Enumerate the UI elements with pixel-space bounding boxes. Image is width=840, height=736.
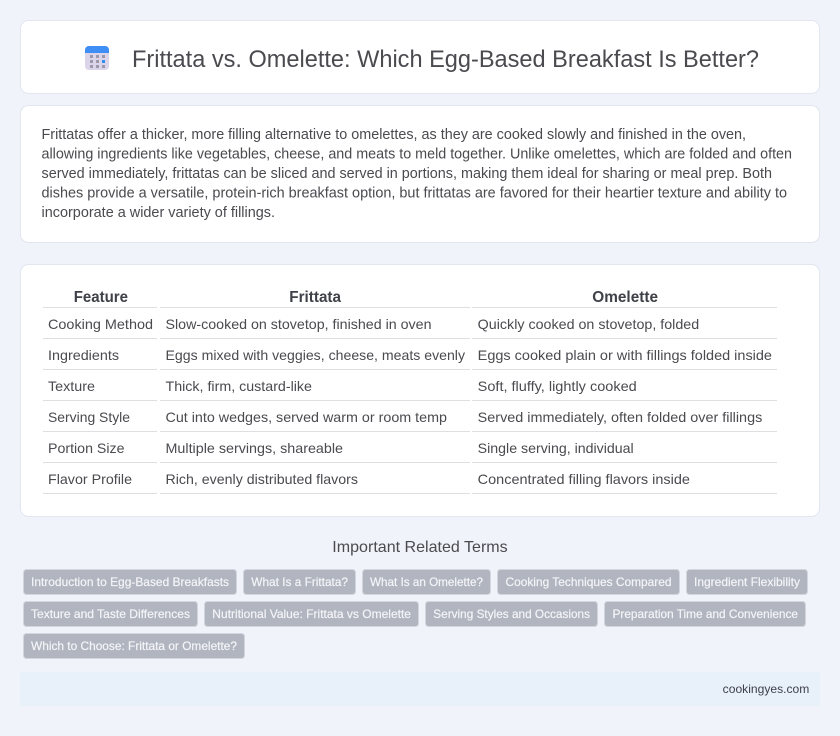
- row: ingredients: [48, 347, 772, 363]
- row: texture: Texture: [48, 378, 95, 394]
- tag labels: Texture and Taste Differences: [31, 607, 190, 621]
- row: cooking method: Quickly cooked on stovetop, folded: [478, 316, 699, 332]
- tag labels: Introduction to Egg-Based Breakfasts: [31, 575, 229, 589]
- tag labels: Cooking Techniques Compared: [506, 575, 672, 589]
- row: serving style: Cut into wedges, served warm or room temp: [166, 409, 447, 425]
- table header row: Frittata: [289, 289, 341, 306]
- row: flavor profile: Rich, evenly distributed flavors: [166, 471, 358, 487]
- tag labels: What Is a Frittata?: [251, 575, 348, 589]
- row: serving style: Serving Style: [48, 409, 130, 425]
- row: ingredients: Ingredients: [48, 347, 119, 363]
- heading: important related terms: Important Related Terms: [332, 539, 508, 556]
- row: portion size: Multiple servings, shareable: [166, 440, 343, 456]
- row: flavor profile: Flavor Profile: [48, 471, 132, 487]
- row: portion size: Single serving, individual: [478, 440, 634, 456]
- panel: related term tags: [24, 570, 808, 658]
- text block: introduction paragraph: [42, 127, 792, 221]
- tag labels: [31, 575, 800, 653]
- table header row: Omelette: [592, 289, 658, 306]
- row: flavor profile: [48, 471, 690, 487]
- footer source text: cookingyes.com: [723, 682, 809, 696]
- footer: [20, 672, 820, 706]
- panel: header: [20, 20, 820, 94]
- tag labels: Preparation Time and Convenience: [612, 607, 798, 621]
- row: cooking method: [48, 316, 699, 332]
- text block: introduction paragraph: incorporate a wider variety of fillings.: [42, 205, 275, 221]
- panel: introduction text: [20, 106, 820, 242]
- row: ingredients: Eggs mixed with veggies, cheese, meats evenly: [166, 347, 465, 363]
- row: texture: Soft, fluffy, lightly cooked: [478, 378, 637, 394]
- row: serving style: [48, 409, 762, 425]
- text block: introduction paragraph: Frittatas offer a thicker, more filling alternative to omelettes, as they are cooked slowly and finished in the oven,: [42, 127, 746, 143]
- row: ingredients: Eggs cooked plain or with fillings folded inside: [478, 347, 772, 363]
- title: Frittata vs. Omelette: Which Egg-Based Breakfast Is Better?: [132, 46, 759, 73]
- tag labels: Ingredient Flexibility: [694, 575, 800, 589]
- tag labels: What Is an Omelette?: [370, 575, 483, 589]
- tag labels: Nutritional Value: Frittata vs Omelette: [212, 607, 411, 621]
- icon: calendar: [85, 46, 109, 70]
- text block: introduction paragraph: allowing ingredients like vegetables, cheese, and meats to meld together. Unlike omelettes, which are folded and often: [42, 146, 792, 162]
- table header row: [74, 289, 658, 306]
- row: cooking method: Slow-cooked on stovetop, finished in oven: [166, 316, 432, 332]
- tag labels: Serving Styles and Occasions: [433, 607, 590, 621]
- row: texture: Thick, firm, custard-like: [166, 378, 312, 394]
- row: flavor profile: Concentrated filling flavors inside: [478, 471, 690, 487]
- table header row: Feature: [74, 289, 128, 306]
- text block: introduction paragraph: dishes provide a versatile, protein-rich breakfast option, but frittatas are favored for their heartier texture and ability to: [42, 186, 787, 202]
- row: portion size: [48, 440, 634, 456]
- row: texture: [48, 378, 637, 394]
- row: portion size: Portion Size: [48, 440, 125, 456]
- row: cooking method: Cooking Method: [48, 316, 153, 332]
- row: serving style: Served immediately, often folded over fillings: [478, 409, 762, 425]
- tag labels: Which to Choose: Frittata or Omelette?: [31, 639, 237, 653]
- text block: introduction paragraph: served immediately, frittatas can be sliced and served in portions, making them ideal for sharing or meal prep. Both: [42, 166, 772, 182]
- panel: comparison table: [20, 264, 820, 516]
